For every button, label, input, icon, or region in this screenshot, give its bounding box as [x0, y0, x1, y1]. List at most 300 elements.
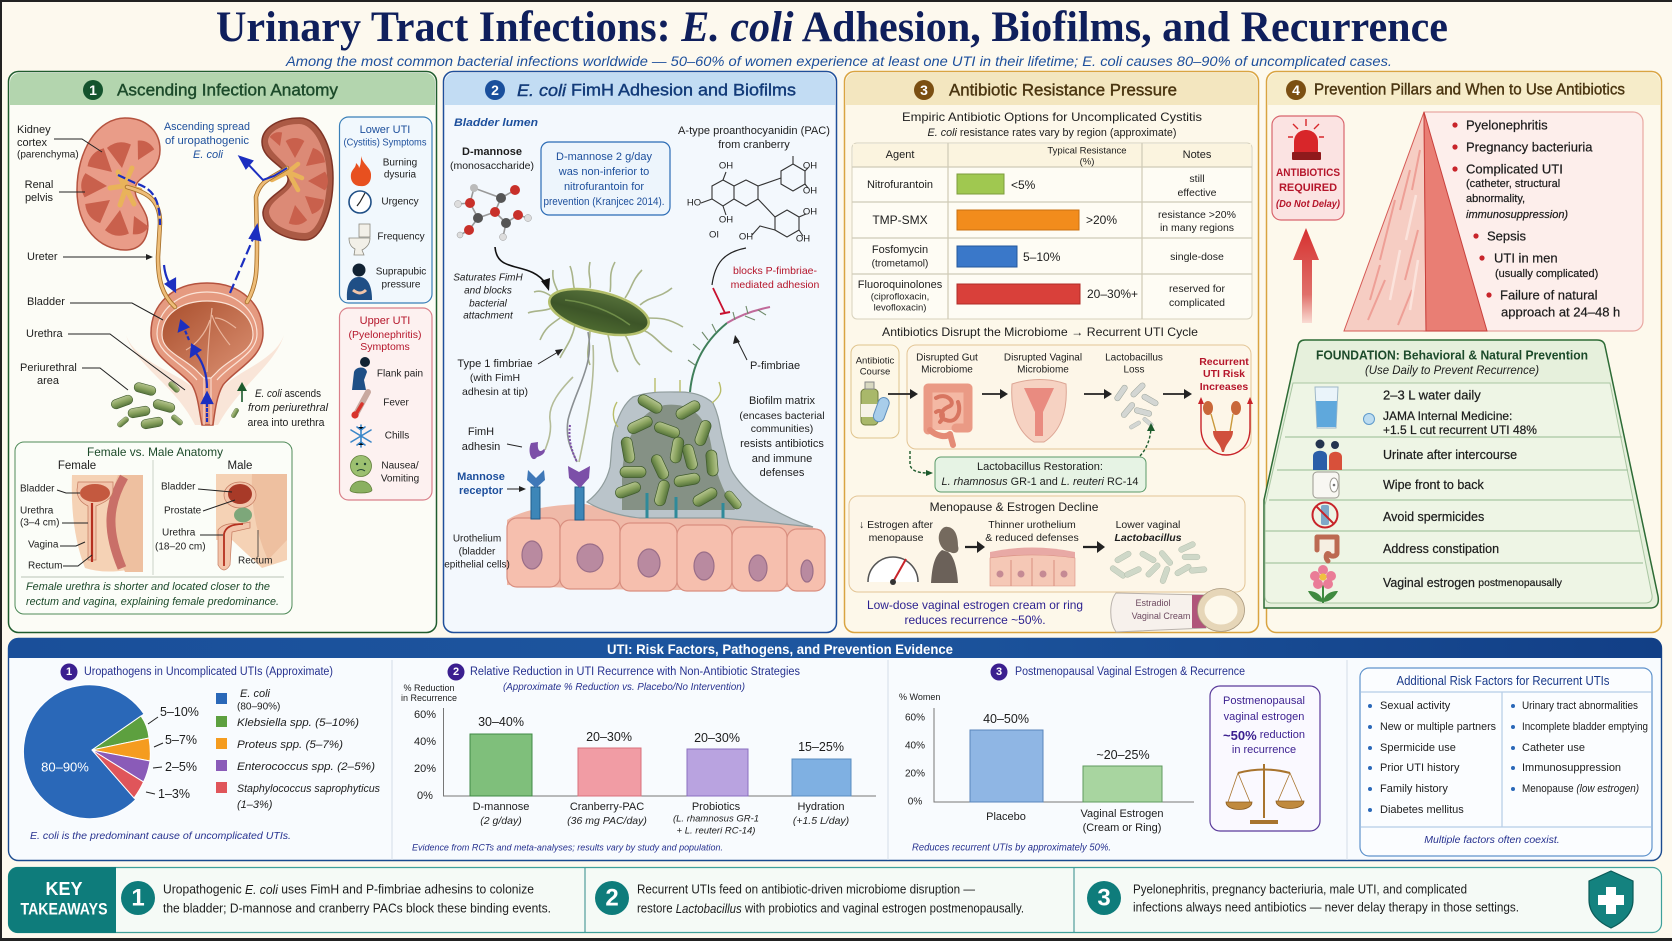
takeaway 3: infections always need antibiotics — never delay therapy in those settings.	[1133, 900, 1519, 914]
chart 2 heading: Relative Reduction in UTI Recurrence with Non-Antibiotic Strategies	[470, 666, 800, 678]
takeaway 2	[595, 881, 1024, 916]
ascends arrow and label	[237, 382, 329, 429]
PAC molecule: OH	[739, 232, 753, 242]
biofilm note: and immune	[752, 453, 812, 465]
biofilm note: resists antibiotics	[740, 438, 824, 450]
pie chart	[23, 685, 150, 819]
pie legend: Klebsiella spp. (5–10%)	[237, 717, 359, 729]
ascends arrow and label: E. coli ascends	[255, 388, 321, 400]
lactobacillus restoration box	[935, 457, 1146, 492]
left kidney	[77, 118, 160, 250]
icon: urinary tract with red outline	[1198, 397, 1253, 455]
ascends arrow and label: area into urethra	[248, 417, 325, 429]
periurethral bacteria	[110, 380, 240, 430]
saturates note: Saturates FimH	[453, 272, 524, 284]
takeaway 2: restore Lactobacillus with probiotics and vaginal estrogen postmenopausally.	[637, 900, 1024, 916]
arrows: ascending spread	[118, 157, 287, 422]
PAC label	[678, 125, 830, 151]
fimbriae and adhesin labels: Type 1 fimbriae	[457, 358, 533, 370]
female vs male anatomy box: Male	[228, 460, 252, 472]
disruption chain box: Recurrent	[1199, 356, 1249, 368]
anatomy labels: pelvis	[25, 192, 54, 204]
male anatomy illustration	[216, 474, 287, 570]
resistance table heading: Empiric Antibiotic Options for Uncomplicated Cystitis	[902, 110, 1202, 124]
row: TMP-SMX: TMP-SMX	[872, 213, 928, 227]
row: TMP-SMX: resistance >20%	[1158, 209, 1236, 221]
upper UTI symptoms box: Upper UTI	[360, 315, 410, 327]
mannose receptors and FimH adhesins	[527, 442, 590, 520]
row: fluoroquinolones: complicated	[1169, 297, 1225, 309]
row: water: 2–3 L water daily	[1383, 388, 1481, 402]
chart 2 heading: 2	[453, 666, 459, 678]
icon: lower lactobacillus	[1109, 541, 1207, 584]
inhibition arrow and note	[712, 248, 820, 314]
antibiotic course box	[851, 345, 899, 438]
dashed restoration arrows	[910, 428, 1151, 473]
row: wipe	[1313, 472, 1484, 498]
bar chart: non-antibiotic strategies: (+1.5 L/day)	[793, 815, 849, 827]
pie legend: Proteus spp. (5–7%)	[237, 739, 343, 751]
female and male anatomy labels: Bladder	[20, 484, 55, 494]
row: fosfomycin: single-dose	[1170, 251, 1224, 263]
D-mannose label	[450, 146, 534, 172]
bar chart: non-antibiotic strategies: Hydration	[797, 801, 845, 813]
panel 3 header: Antibiotic Resistance Pressure	[949, 80, 1177, 100]
lower UTI symptoms box: (Cystitis) Symptoms	[344, 138, 426, 148]
lactobacillus restoration box: L. rhamnosus GR-1 and L. reuteri RC-14	[942, 476, 1138, 488]
row: TMP-SMX: >20%	[1086, 213, 1117, 227]
saturates note	[453, 272, 524, 322]
anatomy labels: Periurethral	[20, 362, 77, 374]
panel 4 header: 4	[1292, 82, 1300, 98]
menopause and estrogen box: ↓ Estrogen after	[859, 519, 934, 531]
fimbriae and adhesin labels: FimH	[468, 426, 494, 438]
row: water: +1.5 L cut recurrent UTI 48%	[1383, 423, 1537, 437]
row: fluoroquinolones: levofloxacin)	[874, 302, 926, 314]
bar chart: non-antibiotic strategies: in Recurrence	[401, 693, 457, 703]
row: fosfomycin: (trometamol)	[872, 258, 928, 270]
resistance table: Agent	[886, 149, 914, 161]
takeaway 3: 3	[1097, 884, 1111, 912]
pie labels: 5–10%	[160, 705, 199, 719]
lower UTI symptoms box: Frequency	[377, 232, 425, 242]
antibiotic indications list	[1452, 118, 1620, 320]
takeaway 1: 1	[131, 884, 145, 912]
bar chart: vaginal estrogen: 60%	[905, 712, 925, 724]
bladder epithelial cells	[507, 504, 825, 591]
PAC label: A-type proanthocyanidin (PAC)	[678, 125, 830, 137]
bacterium with type 1 fimbriae	[528, 262, 683, 462]
bar chart: vaginal estrogen: 40%	[905, 740, 925, 752]
female and male anatomy labels: Prostate	[164, 506, 202, 516]
additional risk factors box: Immunosuppression	[1522, 762, 1621, 774]
additional risk factors box: Additional Risk Factors for Recurrent UTIs	[1396, 674, 1610, 688]
anatomy labels: Bladder	[27, 296, 65, 308]
icon: shield with cross	[1589, 871, 1633, 928]
row: TMP-SMX	[872, 209, 1236, 234]
row: fluoroquinolones	[858, 279, 1226, 314]
female vs male anatomy box: Female vs. Male Anatomy	[87, 445, 223, 459]
foundation trapezoid: FOUNDATION: Behavioral & Natural Prevention	[1316, 348, 1588, 362]
PAC label: from cranberry	[718, 139, 790, 151]
antibiotic indications list: abnormality,	[1466, 193, 1525, 205]
additional risk factors box: Incomplete bladder emptying	[1522, 721, 1648, 733]
menopause and estrogen box: menopause	[869, 532, 924, 544]
resistance table heading	[902, 110, 1202, 139]
ureters	[127, 168, 287, 307]
bar chart: non-antibiotic strategies: 20%	[414, 763, 436, 775]
icon: nausea face	[350, 456, 372, 493]
ascending spread label: of uropathogenic	[165, 135, 250, 147]
estrogen reduction callout: ~50% reduction	[1223, 728, 1305, 742]
takeaway 3	[1087, 881, 1519, 915]
antibiotic indications list: (catheter, structural	[1466, 178, 1560, 190]
panel 4 header	[1268, 73, 1660, 105]
disruption chain box: Lactobacillus	[1105, 352, 1163, 364]
section header: UTI: Risk Factors, Pathogens, and Prevention Evidence	[607, 641, 953, 657]
pie legend: Staphylococcus saprophyticus	[237, 783, 380, 795]
PAC molecule: OH	[803, 160, 817, 172]
bar chart: non-antibiotic strategies: Probiotics	[692, 801, 741, 813]
additional risk factors box: Diabetes mellitus	[1380, 804, 1464, 816]
icon: gut	[926, 388, 970, 445]
non-inferiority callout	[541, 142, 670, 215]
menopause and estrogen box: Lower vaginal	[1116, 519, 1180, 531]
section: risk factors, pathogens and prevention evidence	[8, 638, 1662, 860]
icon: woman silhouette	[931, 527, 958, 583]
D-mannose molecule	[454, 184, 532, 240]
icon: uterus	[1012, 380, 1066, 442]
PAC molecule: OH	[719, 160, 733, 172]
anatomy labels: cortex	[17, 137, 47, 149]
non-inferiority callout: nitrofurantoin for	[564, 181, 644, 193]
bar chart: non-antibiotic strategies: 0%	[417, 790, 433, 802]
row: vaginal estrogen: Vaginal estrogen postmenopausally	[1383, 576, 1563, 590]
bar chart: vaginal estrogen: ~20–25%	[1096, 748, 1150, 762]
panel 3 header: 3	[920, 82, 928, 98]
row: fluoroquinolones: Fluoroquinolones	[858, 279, 943, 291]
fimbriae and adhesin labels	[457, 335, 800, 497]
additional risk factors box: Menopause (low estrogen)	[1522, 783, 1639, 795]
icon: Lactobacillus loss	[1114, 382, 1159, 430]
antibiotics required box: ANTIBIOTICS	[1276, 167, 1340, 179]
fimbriae and adhesin labels: adhesin at tip)	[462, 386, 528, 398]
disruption chain box	[888, 345, 1253, 455]
anatomy labels	[17, 124, 185, 390]
female vs male anatomy box: Female	[58, 460, 96, 472]
takeaway 1	[121, 881, 551, 916]
row: nitrofurantoin: Nitrofurantoin	[867, 179, 933, 191]
bar chart: non-antibiotic strategies: (L. rhamnosus GR-1	[673, 814, 759, 824]
bladder	[126, 283, 284, 425]
takeaway 2: 2	[605, 884, 619, 912]
disruption chain box: UTI Risk	[1203, 368, 1245, 380]
fimbriae and adhesin labels: P-fimbriae	[750, 360, 800, 372]
key takeaways label: KEY	[45, 879, 83, 899]
bar chart: vaginal estrogen	[899, 692, 1194, 834]
pie legend: Enterococcus spp. (2–5%)	[237, 761, 375, 773]
estrogen reduction callout: Postmenopausal	[1223, 695, 1305, 707]
additional risk factors box: Urinary tract abnormalities	[1522, 700, 1638, 712]
arrows in menopause row	[965, 546, 1100, 548]
PAC molecule: OH	[803, 186, 817, 196]
chart 3 heading: 3	[996, 666, 1002, 678]
bar chart: non-antibiotic strategies: % Reduction	[403, 683, 455, 693]
menopause and estrogen box: Menopause & Estrogen Decline	[930, 500, 1099, 514]
disruption chain box: Loss	[1123, 364, 1145, 376]
resistance table heading: E. coli resistance rates vary by region (approximate)	[928, 127, 1176, 139]
row: wipe: Wipe front to back	[1383, 478, 1484, 492]
bar chart: vaginal estrogen: (Cream or Ring)	[1083, 822, 1161, 834]
urothelium label	[444, 534, 510, 570]
row: fluoroquinolones: (ciprofloxacin,	[871, 292, 929, 302]
foundation trapezoid: (Use Daily to Prevent Recurrence)	[1365, 363, 1539, 377]
chart 2 caption: Evidence from RCTs and meta-analyses; results vary by study and population.	[412, 842, 723, 854]
female and male anatomy labels: (3–4 cm)	[20, 518, 59, 528]
menopause and estrogen box	[849, 496, 1245, 592]
pyramid	[1344, 112, 1487, 331]
bladder lumen label: Bladder lumen	[454, 117, 538, 129]
disruption chain box: Increases	[1200, 381, 1248, 393]
upper UTI symptoms box: Chills	[385, 430, 409, 442]
upper UTI symptoms box	[340, 308, 432, 500]
anatomy labels: (parenchyma)	[17, 150, 79, 160]
P-fimbria	[688, 306, 770, 392]
panel 4 header: Prevention Pillars and When to Use Antibiotics	[1314, 82, 1625, 98]
pie legend: E. coli	[240, 688, 271, 700]
PAC molecule: HO	[687, 198, 701, 208]
additional risk factors box: Multiple factors often coexist.	[1424, 834, 1560, 846]
icon: estradiol cream and ring: Vaginal Cream	[1132, 611, 1190, 621]
row: water	[1315, 387, 1537, 437]
chart 1 heading	[60, 664, 333, 680]
pie labels: 1–3%	[158, 787, 190, 801]
chart 3 heading	[990, 664, 1245, 680]
estrogen recommendation	[867, 598, 1083, 627]
biofilm note: Biofilm matrix	[749, 395, 815, 407]
row: urinate: Urinate after intercourse	[1383, 448, 1517, 462]
icon: red siren	[1288, 119, 1324, 160]
D-mannose label: D-mannose	[462, 146, 522, 158]
estrogen recommendation: Low-dose vaginal estrogen cream or ring	[867, 598, 1083, 612]
additional risk factors box: Sexual activity	[1380, 700, 1451, 712]
PAC molecule: OH	[796, 234, 810, 244]
panel 3: antibiotic resistance pressure	[844, 72, 1258, 632]
non-inferiority callout: was non-inferior to	[558, 166, 649, 178]
biofilm note: defenses	[760, 467, 805, 479]
arrows along chain	[888, 393, 1186, 395]
row: fluoroquinolones: reserved for	[1169, 283, 1226, 295]
panel 2 header	[445, 73, 835, 105]
antibiotic course box: Antibiotic	[856, 356, 895, 366]
bar chart: vaginal estrogen: 0%	[908, 796, 922, 808]
bar chart: non-antibiotic strategies: Cranberry-PAC	[570, 801, 644, 813]
saturates note: bacterial	[469, 298, 508, 310]
disruption chain box: Microbiome	[1017, 364, 1069, 376]
panel 4: prevention pillars	[1264, 72, 1662, 632]
menopause and estrogen box: Lactobacillus	[1114, 532, 1182, 544]
icon: clock	[349, 191, 371, 213]
additional risk factors box: Family history	[1380, 783, 1448, 795]
subtitle: Among the most common bacterial infections worldwide — 50–60% of women experience at least one UTI in their lifetime; E. coli causes 80–90% of uncomplicated cases.	[285, 53, 1392, 69]
additional risk factors box: Spermicide use	[1380, 742, 1456, 754]
icon: thermometer	[351, 392, 368, 419]
bar chart: vaginal estrogen: % Women	[899, 692, 940, 702]
antibiotic indications list: (usually complicated)	[1495, 268, 1598, 280]
row: water: JAMA Internal Medicine:	[1383, 409, 1512, 423]
ascending spread label: Ascending spread	[164, 121, 250, 133]
panel 2: FimH adhesion and biofilms	[444, 72, 836, 632]
biofilm note: (encases bacterial	[739, 410, 825, 422]
female predominance note: Female urethra is shorter and located closer to the	[26, 581, 270, 593]
female and male anatomy labels: Vagina	[28, 540, 59, 550]
anatomy labels: Renal	[25, 179, 53, 191]
pie labels	[146, 705, 199, 801]
estrogen reduction callout: vaginal estrogen	[1224, 711, 1304, 723]
resistance table	[852, 143, 1252, 319]
bar chart: non-antibiotic strategies: 15–25%	[798, 740, 844, 754]
bar chart: non-antibiotic strategies: 30–40%	[478, 715, 524, 729]
bar chart: vaginal estrogen: 40–50%	[983, 712, 1029, 726]
icon: flame	[351, 156, 371, 186]
female and male anatomy labels	[20, 482, 272, 572]
additional risk factors box: Prior UTI history	[1380, 762, 1460, 774]
antibiotics required box	[1272, 116, 1344, 220]
resistance table: Typical Resistance	[1047, 146, 1127, 156]
urothelium label: epithelial cells)	[444, 560, 510, 570]
chart 3 heading: Postmenopausal Vaginal Estrogen & Recurrence	[1015, 666, 1245, 678]
menopause and estrogen box: & reduced defenses	[985, 532, 1079, 544]
resistance table: (%)	[1080, 156, 1094, 168]
anatomy labels: area	[37, 375, 60, 387]
icon: snowflake	[351, 425, 371, 447]
resistance table: Notes	[1183, 149, 1212, 161]
icon: thin urothelium	[990, 548, 1075, 586]
icon: toilet	[349, 224, 370, 255]
fimbriae and adhesin labels: adhesin	[462, 441, 500, 453]
row: TMP-SMX: in many regions	[1160, 222, 1234, 234]
estrogen recommendation: reduces recurrence ~50%.	[904, 613, 1046, 627]
urothelium label: (bladder	[459, 546, 496, 558]
upper UTI symptoms box: Nausea/	[381, 460, 419, 472]
urothelium label: Urothelium	[453, 534, 501, 544]
row: fosfomycin: 5–10%	[1023, 250, 1061, 264]
bar chart: non-antibiotic strategies: 20–30%	[586, 730, 632, 744]
saturates note: attachment	[463, 310, 514, 322]
icon: flank pain person	[352, 357, 370, 390]
antibiotic indications list: Pregnancy bacteriuria	[1466, 140, 1593, 154]
female and male anatomy labels: Rectum	[238, 556, 272, 566]
row: urinate	[1313, 440, 1517, 470]
pie legend: (1–3%)	[237, 799, 273, 811]
row: nitrofurantoin: <5%	[1011, 178, 1036, 192]
takeaway 3: Pyelonephritis, pregnancy bacteriuria, male UTI, and complicated	[1133, 882, 1467, 896]
disruption chain box: Disrupted Vaginal	[1004, 352, 1082, 364]
pie labels: 2–5%	[165, 760, 197, 774]
antibiotic indication box	[1424, 112, 1643, 331]
ascends arrow and label: from periurethral	[248, 402, 329, 414]
lower UTI symptoms box: Burning	[383, 158, 417, 168]
female vs male anatomy box	[15, 442, 292, 614]
lower UTI symptoms box: dysuria	[384, 170, 417, 180]
PAC molecule	[687, 156, 817, 244]
antibiotic indications list: Failure of natural	[1500, 288, 1598, 302]
non-inferiority callout: prevention (Kranjcec 2014).	[544, 196, 664, 208]
pie legend	[216, 688, 380, 811]
bar chart: non-antibiotic strategies: 60%	[414, 709, 436, 721]
lower UTI symptoms box: Lower UTI	[360, 124, 410, 136]
additional risk factors box	[1360, 668, 1652, 856]
red upward arrow	[1293, 228, 1319, 323]
row: fosfomycin	[872, 244, 1224, 270]
panel 1 header: Ascending Infection Anatomy	[117, 80, 339, 100]
bar chart: non-antibiotic strategies: D-mannose	[473, 801, 529, 813]
anatomy labels: Kidney	[17, 124, 51, 136]
antibiotics required box: (Do Not Delay)	[1276, 198, 1340, 210]
panel 2 header: E. coli FimH Adhesion and Biofilms	[517, 80, 796, 100]
anatomy labels: Urethra	[26, 328, 64, 340]
chart 1 heading: 1	[66, 666, 72, 678]
antibiotic indications list: UTI in men	[1494, 250, 1558, 266]
upper UTI symptoms box: (Pyelonephritis)	[349, 329, 421, 341]
foundation trapezoid	[1264, 340, 1658, 608]
bar chart: non-antibiotic strategies	[401, 683, 876, 836]
female and male anatomy labels: Urethra	[162, 528, 196, 538]
biofilm matrix	[587, 378, 813, 527]
panel 3 header	[846, 73, 1257, 105]
chart 3 caption: Reduces recurrent UTIs by approximately 50%.	[912, 842, 1111, 854]
upper UTI symptoms box: Symptoms	[360, 341, 410, 353]
menopause and estrogen box: Thinner urothelium	[988, 519, 1076, 531]
D-mannose label: (monosaccharide)	[450, 160, 534, 172]
panel 1 header	[10, 73, 435, 105]
disruption chain box: Disrupted Gut	[916, 352, 978, 364]
antibiotic course box: Course	[860, 366, 890, 378]
panel 1 header: 1	[89, 82, 97, 98]
lower UTI symptoms box: Urgency	[381, 196, 419, 208]
row: spermicides	[1312, 502, 1484, 528]
bar chart: vaginal estrogen: Placebo	[986, 811, 1026, 823]
lactobacillus restoration box: Lactobacillus Restoration:	[977, 461, 1103, 473]
bar chart: vaginal estrogen: Vaginal Estrogen	[1081, 808, 1163, 820]
row: constipation: Address constipation	[1383, 542, 1499, 556]
pie caption: E. coli is the predominant cause of uncomplicated UTIs.	[30, 830, 291, 842]
upper UTI symptoms box: Fever	[383, 398, 409, 408]
takeaway 1: Uropathogenic E. coli uses FimH and P-fimbriae adhesins to colonize	[163, 882, 534, 896]
chart 1 heading: Uropathogens in Uncomplicated UTIs (Approximate)	[84, 666, 333, 678]
estrogen reduction callout	[1210, 686, 1320, 831]
fimbriae and adhesin labels: (with FimH	[470, 372, 520, 384]
female and male anatomy labels: Rectum	[28, 560, 62, 572]
icon: estradiol cream and ring: Estradiol	[1135, 598, 1171, 608]
title: Urinary Tract Infections: E. coli Adhesion, Biofilms, and Recurrence	[216, 4, 1448, 51]
non-inferiority callout: D-mannose 2 g/day	[556, 151, 652, 163]
female anatomy illustration	[72, 475, 143, 572]
bar chart: non-antibiotic strategies: 40%	[414, 736, 436, 748]
antibiotic indications list: approach at 24–48 h	[1501, 304, 1620, 320]
row: nitrofurantoin: effective	[1178, 187, 1217, 199]
antibiotic indications list: Complicated UTI	[1466, 162, 1563, 176]
row: constipation	[1317, 537, 1499, 561]
disruption chain box: Microbiome	[921, 364, 973, 376]
upper UTI symptoms box: Flank pain	[377, 368, 423, 380]
antibiotic indications list: Pyelonephritis	[1466, 118, 1548, 132]
row: fluoroquinolones: 20–30%+	[1087, 287, 1138, 301]
bar chart: vaginal estrogen: 20%	[905, 768, 925, 780]
estrogen reduction callout: in recurrence	[1232, 744, 1296, 756]
takeaway 2: Recurrent UTIs feed on antibiotic-driven microbiome disruption —	[637, 882, 975, 896]
PAC molecule: OH	[719, 214, 733, 226]
